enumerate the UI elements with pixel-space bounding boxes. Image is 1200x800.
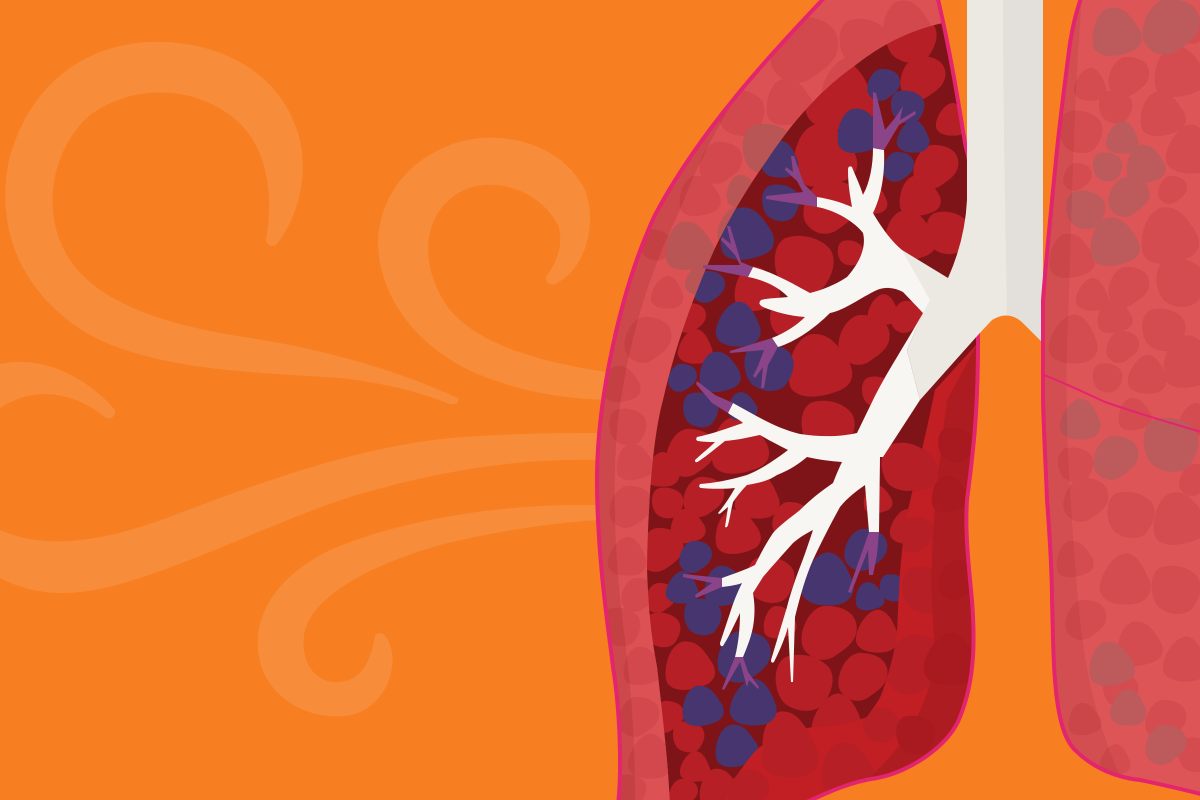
bronchiole tip: middle <box>730 338 778 388</box>
left lung outline <box>597 0 978 800</box>
lung interior <box>597 0 978 800</box>
upper bronchus <box>748 148 930 347</box>
wind swirl: large top <box>5 42 458 404</box>
wind swirl: small left <box>0 362 115 418</box>
darker outer strip of band <box>597 90 740 800</box>
damaged bronchiole tips <box>683 92 916 690</box>
wind swirl: long wave <box>0 433 600 593</box>
bronchiole tip: middle left <box>696 381 733 413</box>
wind swirl: lower curl <box>258 505 600 716</box>
wind swirls <box>0 42 606 716</box>
bronchiole tip: lower left <box>683 574 722 598</box>
right lung <box>1043 0 1200 795</box>
trachea <box>902 0 1043 400</box>
bronchiole tip: top <box>873 92 916 150</box>
right lung grey alveoli <box>1060 0 1200 765</box>
front translucent lung band <box>597 0 943 800</box>
healthy alveoli <box>638 13 970 800</box>
left lung <box>597 0 985 800</box>
right lung shaded strip <box>1043 0 1120 776</box>
right translucent lung layer <box>722 330 985 800</box>
damaged alveoli <box>666 69 929 767</box>
trachea shaded side <box>1003 0 1043 343</box>
darker outer strip <box>874 347 976 776</box>
bronchiole tip: bottom <box>722 657 759 690</box>
bronchiole tip: upper left <box>703 226 753 277</box>
lung fissure <box>1044 375 1200 433</box>
wind swirl: middle <box>378 138 606 400</box>
bronchiole tip: upper <box>766 156 817 207</box>
right lung outline <box>1043 0 1200 795</box>
lower bronchus <box>695 313 923 682</box>
right lung alveoli <box>1049 16 1200 775</box>
bronchial tree <box>695 148 930 682</box>
bronchiole tip: lower right <box>848 532 879 593</box>
right lung body <box>1043 0 1200 795</box>
